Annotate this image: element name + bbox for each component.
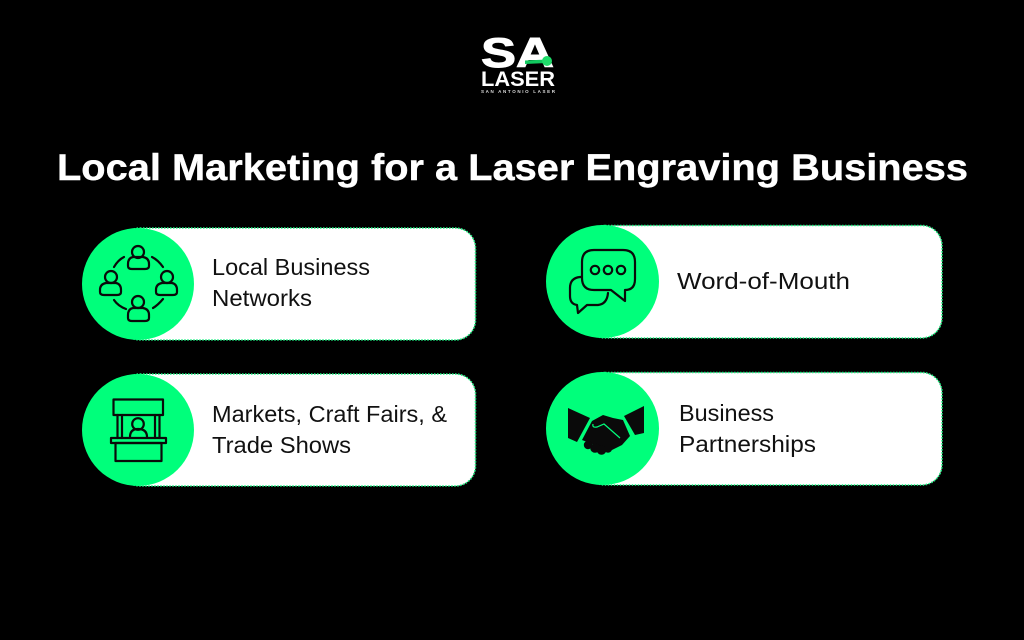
logo: SA Laser: LASER: [481, 67, 555, 91]
logo: SA Laser: SAN ANTONIO LASER: [481, 89, 556, 94]
panel: markets, craft fairs, trade shows: [82, 374, 476, 486]
logo: SA Laser: [481, 29, 556, 94]
panel: local business networks: [82, 228, 476, 340]
label: [212, 401, 447, 458]
icon: market stall: [82, 374, 194, 486]
icon: people network: [82, 228, 194, 340]
label: [212, 254, 370, 311]
label: Word-of-Mouth: [677, 268, 850, 294]
panel: word of mouth: [546, 225, 942, 338]
label: Trade Shows: [212, 432, 351, 458]
label: Networks: [212, 285, 312, 311]
panel: business partnerships: [546, 372, 942, 485]
label: Markets, Craft Fairs, &: [212, 401, 447, 427]
icon: handshake: [546, 372, 659, 485]
label: Partnerships: [679, 431, 816, 457]
title: Local Marketing for a Laser Engraving Business: [57, 147, 968, 188]
logo: SA Laser: SA: [481, 29, 554, 76]
label: [679, 400, 816, 457]
label: Business: [679, 400, 774, 426]
icon: chat bubbles: [546, 225, 659, 338]
label: Local Business: [212, 254, 370, 280]
